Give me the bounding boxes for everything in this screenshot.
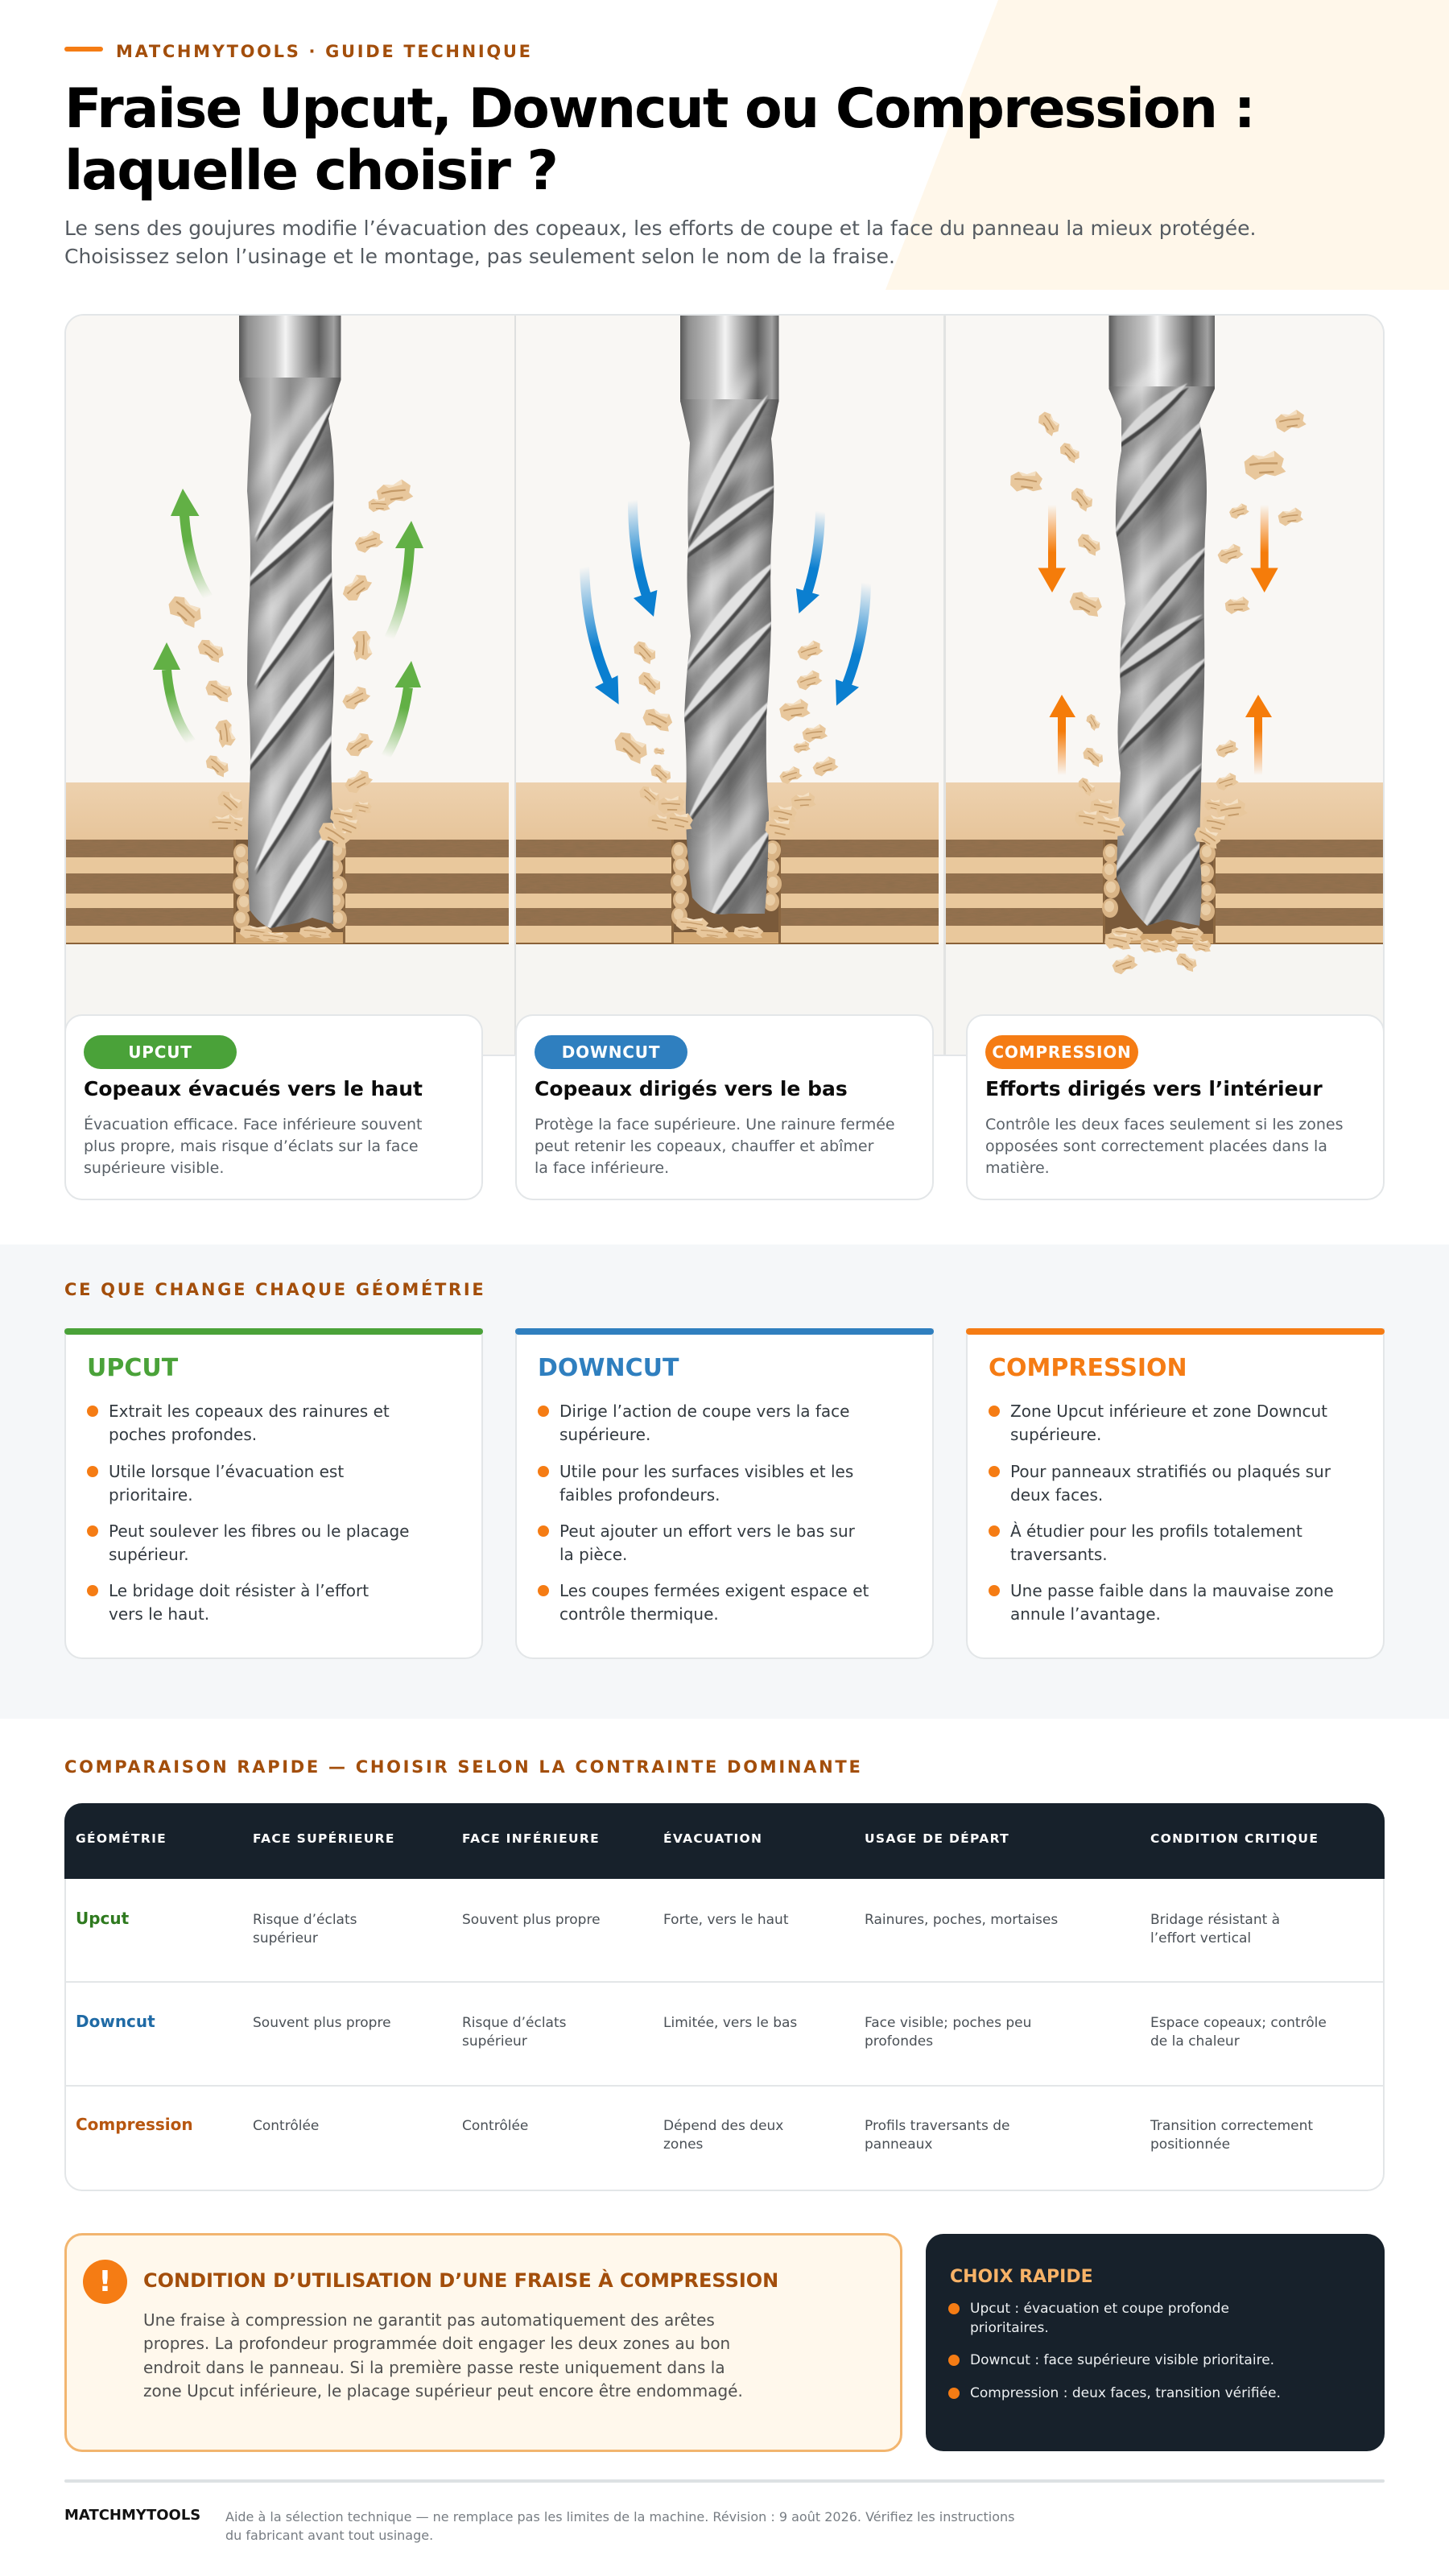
panel: upcut details bbox=[64, 1328, 483, 1659]
bullet: supérieure. bbox=[559, 1425, 650, 1444]
bullet: poches profondes. bbox=[109, 1425, 257, 1444]
row: compression: Compression bbox=[76, 2115, 193, 2134]
cell bbox=[1150, 2117, 1313, 2154]
card text: matière. bbox=[985, 1159, 1050, 1177]
callout: compression warning bbox=[64, 2233, 902, 2452]
card: downcut summary bbox=[515, 1014, 934, 1200]
bullet: Les coupes fermées exigent espace et bbox=[559, 1581, 869, 1600]
arrow: green up bbox=[386, 661, 421, 757]
bullet: vers le haut. bbox=[109, 1604, 209, 1623]
card text: supérieure visible. bbox=[84, 1159, 224, 1177]
panel: quick choice bbox=[926, 2234, 1385, 2451]
row: upcut: Upcut bbox=[76, 1909, 129, 1928]
bullet bbox=[1010, 1460, 1331, 1506]
column header: FACE INFÉRIEURE bbox=[462, 1831, 600, 1846]
arrow: green up bbox=[171, 489, 208, 597]
card heading: Copeaux évacués vers le haut bbox=[84, 1077, 423, 1100]
bullet bbox=[559, 1400, 849, 1446]
footer rule bbox=[64, 2479, 1385, 2483]
bullet: traversants. bbox=[1010, 1544, 1108, 1563]
comparison table bbox=[64, 1803, 1385, 2191]
bullet: Extrait les copeaux des rainures et bbox=[109, 1402, 390, 1421]
warning heading: CONDITION D’UTILISATION D’UNE FRAISE À COMPRESSION bbox=[143, 2269, 778, 2292]
quick choice item: prioritaires. bbox=[970, 2320, 1049, 2336]
bullet bbox=[559, 1579, 869, 1625]
panel: compression illustration bbox=[946, 315, 1385, 1055]
arrow: orange down bbox=[1251, 505, 1278, 592]
compression chips bbox=[1009, 407, 1307, 977]
cell bbox=[1150, 1911, 1280, 1948]
bullet: Utile pour les surfaces visibles et les bbox=[559, 1462, 853, 1481]
section heading: geometry: CE QUE CHANGE CHAQUE GÉOMÉTRIE bbox=[64, 1280, 485, 1299]
cell: Espace copeaux; contrôle bbox=[1150, 2015, 1327, 2031]
cell bbox=[462, 2014, 566, 2051]
bullet: prioritaire. bbox=[109, 1484, 193, 1504]
column header: USAGE DE DÉPART bbox=[865, 1831, 1009, 1846]
arrow: orange down bbox=[1038, 505, 1066, 592]
downcut cutter bbox=[674, 315, 785, 941]
panel: downcut details bbox=[515, 1328, 934, 1659]
pill: downcut bbox=[535, 1035, 687, 1069]
panel: upcut illustration bbox=[66, 316, 509, 944]
pill: compression: COMPRESSION bbox=[992, 1042, 1132, 1062]
bullet: Zone Upcut inférieure et zone Downcut bbox=[1010, 1402, 1327, 1421]
icon: warning: ! bbox=[98, 2265, 112, 2298]
bullet bbox=[87, 1462, 344, 1504]
card: upcut summary bbox=[64, 1014, 483, 1200]
bullet: À étudier pour les profils totalement bbox=[1010, 1521, 1302, 1541]
bullet: Utile lorsque l’évacuation est bbox=[109, 1462, 344, 1481]
warning text: propres. La profondeur programmée doit engager les deux zones au bon bbox=[143, 2334, 730, 2353]
top bar bbox=[64, 1328, 483, 1335]
card text: la face inférieure. bbox=[535, 1159, 669, 1177]
section background: geometry bbox=[0, 1245, 1449, 1719]
card text: plus propre, mais risque d’éclats sur la face bbox=[84, 1137, 419, 1155]
card: compression summary bbox=[966, 1014, 1385, 1200]
bullet bbox=[1010, 1400, 1327, 1446]
card text: Protège la face supérieure. Une rainure fermée bbox=[535, 1116, 895, 1133]
card text: opposées sont correctement placées dans la bbox=[985, 1137, 1327, 1155]
cell: Souvent plus propre bbox=[462, 1912, 601, 1928]
quick choice item: Compression : deux faces, transition vérifiée. bbox=[970, 2385, 1281, 2401]
footer note bbox=[225, 2508, 1014, 2545]
bullet: annule l’avantage. bbox=[1010, 1604, 1161, 1623]
bullet: supérieure. bbox=[1010, 1425, 1101, 1444]
arrow: blue down bbox=[584, 567, 619, 704]
eyebrow accent bar bbox=[64, 47, 103, 52]
cell: supérieur bbox=[462, 2033, 527, 2050]
cell bbox=[865, 2117, 1009, 2154]
icon: warning bbox=[83, 2260, 127, 2304]
cell: zones bbox=[663, 2136, 703, 2153]
cell: Face visible; poches peu bbox=[865, 2015, 1031, 2031]
column header: CONDITION CRITIQUE bbox=[1150, 1831, 1319, 1846]
bullet bbox=[1010, 1579, 1334, 1625]
upcut chips flying bbox=[164, 476, 415, 850]
section heading: comparison: COMPARAISON RAPIDE — CHOISIR SELON LA CONTRAINTE DOMINANTE bbox=[64, 1757, 862, 1777]
warning text bbox=[143, 2309, 743, 2403]
arrow: green up bbox=[389, 521, 423, 638]
chips in the upcut slot bbox=[233, 842, 347, 942]
top bar bbox=[515, 1328, 934, 1335]
arrow: orange up bbox=[1050, 695, 1075, 775]
cell: Risque d’éclats bbox=[253, 1912, 357, 1928]
quick choice item: Downcut : face supérieure visible prioritaire. bbox=[970, 2352, 1274, 2368]
title: laquelle choisir ? bbox=[64, 139, 557, 203]
bullet: contrôle thermique. bbox=[559, 1604, 719, 1623]
chips in the downcut slot bbox=[671, 840, 782, 939]
quick choice heading: CHOIX RAPIDE bbox=[950, 2267, 1093, 2287]
column header: GÉOMÉTRIE bbox=[76, 1831, 167, 1846]
arrow: blue down bbox=[633, 500, 657, 617]
bullet bbox=[559, 1520, 855, 1566]
arrow: blue down bbox=[836, 583, 866, 706]
cell: Limitée, vers le bas bbox=[663, 2015, 797, 2031]
column header: ÉVACUATION bbox=[663, 1831, 762, 1846]
cell: Contrôlée bbox=[253, 2118, 319, 2134]
cell: panneaux bbox=[865, 2136, 932, 2153]
footer brand: MATCHMYTOOLS bbox=[64, 2507, 200, 2524]
quick choice item: Upcut : évacuation et coupe profonde bbox=[970, 2301, 1229, 2317]
card text bbox=[985, 1116, 1343, 1177]
bullet bbox=[1010, 1520, 1302, 1566]
bullet: Peut ajouter un effort vers le bas sur bbox=[559, 1521, 855, 1541]
quick choice item bbox=[970, 2300, 1229, 2338]
table header bbox=[64, 1803, 1385, 1879]
card text: Contrôle les deux faces seulement si les zones bbox=[985, 1116, 1343, 1133]
card text: Évacuation efficace. Face inférieure souvent bbox=[84, 1116, 422, 1133]
bullet: la pièce. bbox=[559, 1544, 627, 1563]
cell: l’effort vertical bbox=[1150, 1930, 1251, 1946]
card text bbox=[84, 1116, 422, 1177]
cell: positionnée bbox=[1150, 2136, 1230, 2153]
bullet bbox=[87, 1402, 390, 1444]
bullet: supérieur. bbox=[109, 1544, 189, 1563]
cell: Souvent plus propre bbox=[253, 2015, 391, 2031]
footer note: du fabricant avant tout usinage. bbox=[225, 2528, 433, 2542]
row: downcut: Downcut bbox=[76, 2012, 155, 2031]
bullet: Peut soulever les fibres ou le placage bbox=[109, 1521, 409, 1541]
card text bbox=[535, 1116, 895, 1177]
card heading: Efforts dirigés vers l’intérieur bbox=[985, 1077, 1323, 1100]
title: Fraise Upcut, Downcut ou Compression : bbox=[64, 77, 1254, 141]
cell: supérieur bbox=[253, 1930, 318, 1946]
cell: Transition correctement bbox=[1150, 2118, 1313, 2134]
bullet: Dirige l’action de coupe vers la face bbox=[559, 1402, 849, 1421]
subtitle: Choisissez selon l’usinage et le montage, pas seulement selon le nom de la fraise. bbox=[64, 245, 895, 268]
arrow: green up bbox=[153, 642, 192, 742]
bullet: Pour panneaux stratifiés ou plaqués sur bbox=[1010, 1462, 1331, 1481]
bullet: faibles profondeurs. bbox=[559, 1484, 720, 1504]
row divider bbox=[66, 1981, 1383, 1983]
cell: Risque d’éclats bbox=[462, 2015, 566, 2031]
cell: Bridage résistant à bbox=[1150, 1912, 1280, 1928]
eyebrow: MATCHMYTOOLS · GUIDE TECHNIQUE bbox=[116, 42, 533, 61]
cell: de la chaleur bbox=[1150, 2033, 1240, 2050]
pill: downcut: DOWNCUT bbox=[562, 1042, 660, 1062]
arrow: blue down bbox=[796, 511, 820, 613]
bullet: deux faces. bbox=[1010, 1484, 1103, 1504]
cell bbox=[1150, 2014, 1327, 2051]
card heading: Copeaux dirigés vers le bas bbox=[535, 1077, 848, 1100]
footer note: Aide à la sélection technique — ne remplace pas les limites de la machine. Révision : 9 août 2026. Vérifiez les instructions bbox=[225, 2509, 1014, 2524]
arrow: orange up bbox=[1245, 695, 1272, 775]
cell: Rainures, poches, mortaises bbox=[865, 1912, 1058, 1928]
downcut chips falling bbox=[610, 638, 840, 838]
bullet bbox=[559, 1460, 853, 1506]
cell: Profils traversants de bbox=[865, 2118, 1009, 2134]
warning text: Une fraise à compression ne garantit pas automatiquement des arêtes bbox=[143, 2310, 715, 2330]
chips in the compression slot bbox=[1102, 844, 1216, 941]
subtitle bbox=[64, 217, 1256, 268]
cell: Dépend des deux bbox=[663, 2118, 783, 2134]
bullet bbox=[87, 1581, 369, 1623]
pill: compression bbox=[985, 1035, 1138, 1069]
column header: FACE SUPÉRIEURE bbox=[253, 1831, 395, 1846]
bullet: Le bridage doit résister à l’effort bbox=[109, 1581, 369, 1600]
subtitle: Le sens des goujures modifie l’évacuation des copeaux, les efforts de coupe et la face du panneau la mieux protégée. bbox=[64, 217, 1256, 240]
cell bbox=[663, 2117, 783, 2154]
pill: upcut: UPCUT bbox=[128, 1042, 192, 1062]
warning text: zone Upcut inférieure, le placage supérieur peut encore être endommagé. bbox=[143, 2381, 743, 2401]
warning text: endroit dans le panneau. Si la première passe reste uniquement dans la bbox=[143, 2358, 725, 2377]
panel: downcut illustration bbox=[516, 315, 944, 1055]
compression cutter bbox=[1104, 315, 1216, 953]
top bar bbox=[966, 1328, 1385, 1335]
cell bbox=[253, 1911, 357, 1948]
panel: compression details bbox=[966, 1328, 1385, 1659]
row divider bbox=[66, 2085, 1383, 2087]
cell: Forte, vers le haut bbox=[663, 1912, 788, 1928]
bullet: Une passe faible dans la mauvaise zone bbox=[1010, 1581, 1334, 1600]
heading: COMPRESSION bbox=[989, 1354, 1187, 1382]
pill: upcut bbox=[84, 1035, 237, 1069]
cell: Contrôlée bbox=[462, 2118, 528, 2134]
heading: DOWNCUT bbox=[538, 1354, 679, 1382]
card text: peut retenir les copeaux, chauffer et abîmer bbox=[535, 1137, 873, 1155]
hero background shape bbox=[886, 0, 1449, 290]
cell bbox=[865, 2014, 1031, 2051]
cell: profondes bbox=[865, 2033, 933, 2050]
upcut cutter bbox=[237, 315, 345, 956]
bullet bbox=[87, 1521, 409, 1563]
illustrations: three cutters bbox=[66, 316, 1383, 1055]
panel: illustrations frame bbox=[64, 314, 1385, 1056]
heading: UPCUT bbox=[87, 1354, 178, 1382]
title bbox=[64, 77, 1254, 203]
